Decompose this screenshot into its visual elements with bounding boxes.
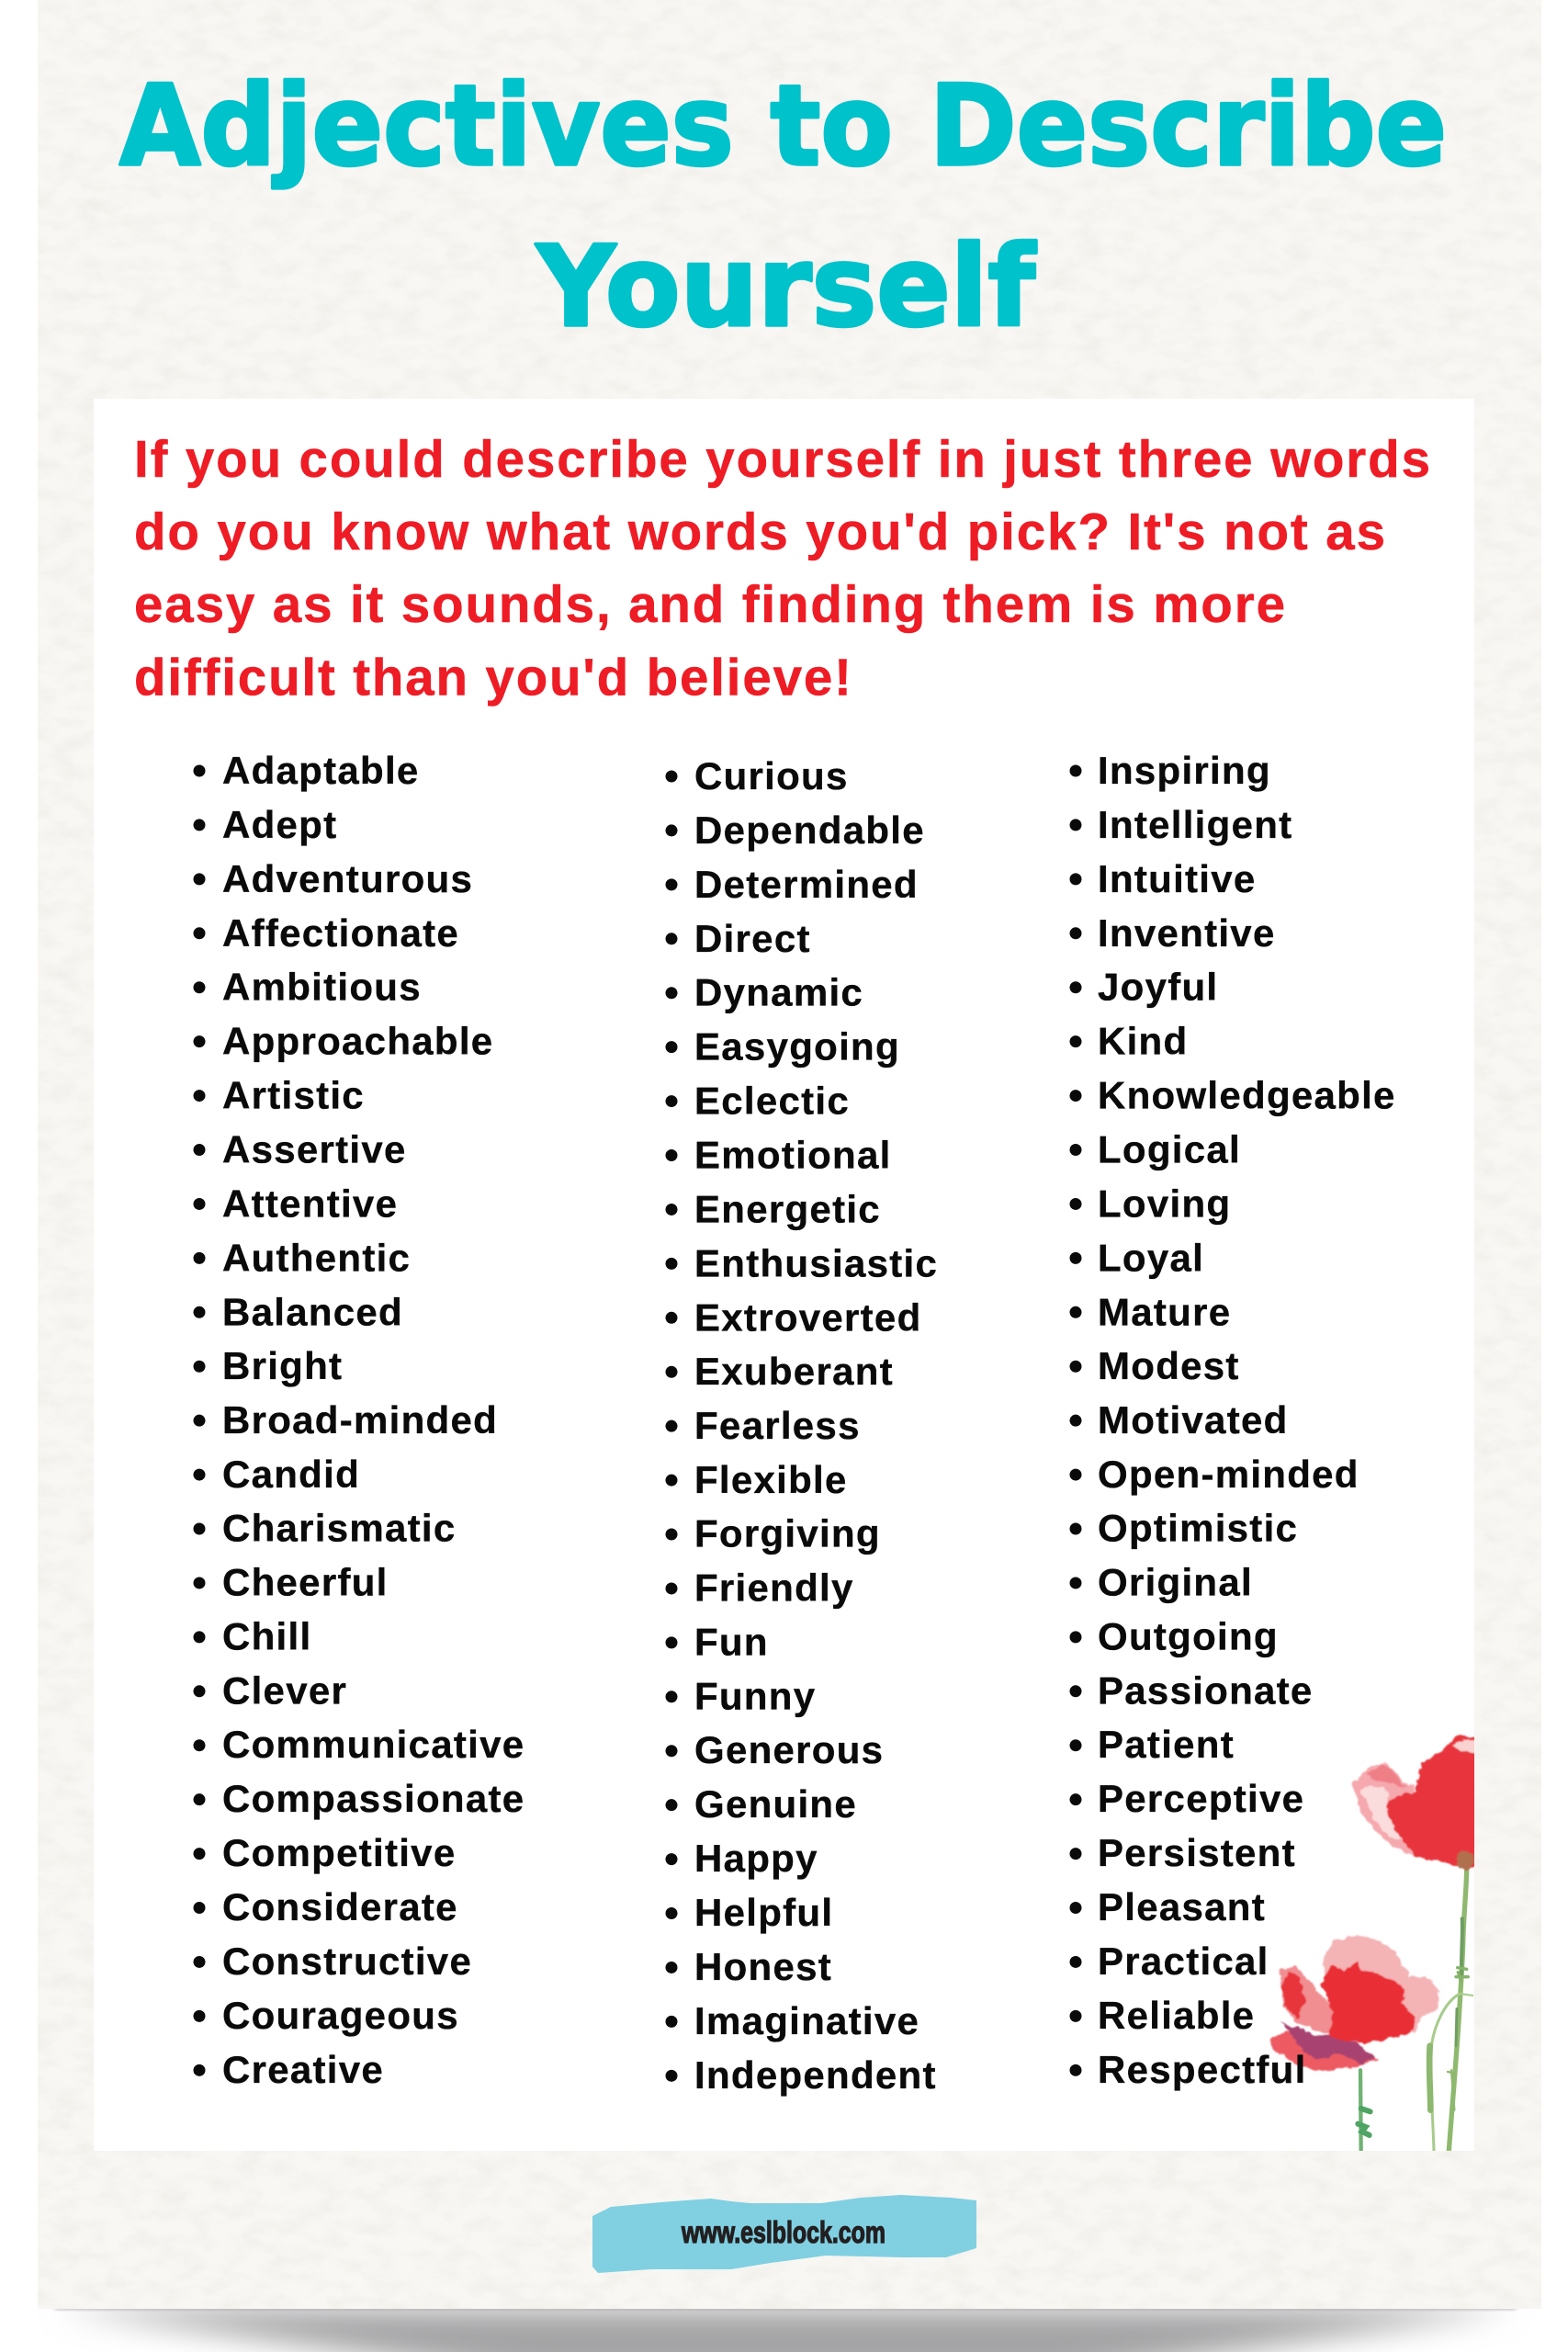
- word list: column 1: [199, 749, 536, 2091]
- word list: column 3: Joyful: [1098, 966, 1218, 1009]
- word list: column 2: Determined: [694, 863, 919, 906]
- word list: column 2: Extroverted: [694, 1295, 922, 1339]
- word list: column 1: Adept: [222, 803, 337, 846]
- word list: column 2: Eclectic: [694, 1080, 850, 1123]
- word list: column 1: Bright: [222, 1344, 343, 1387]
- word list: column 3: Logical: [1098, 1128, 1241, 1170]
- word list: column 3: Reliable: [1098, 1994, 1255, 2037]
- word list: column 1: Affectionate: [222, 911, 459, 955]
- word list: column 3: Passionate: [1098, 1668, 1314, 1712]
- word list: column 1: Adventurous: [222, 857, 473, 900]
- word list: column 3: Loyal: [1098, 1236, 1204, 1279]
- word list: column 1: Clever: [222, 1668, 347, 1712]
- word list: column 2: Flexible: [694, 1458, 848, 1501]
- icon: poppy stems: [1358, 1871, 1472, 2151]
- word list: column 1: Constructive: [222, 1939, 472, 1983]
- word list: column 3: Loving: [1098, 1182, 1231, 1225]
- word list: column 3: Mature: [1098, 1290, 1231, 1333]
- word list: column 1: Considerate: [222, 1885, 458, 1928]
- word list: column 3: Patient: [1098, 1723, 1235, 1766]
- word list: column 2: Curious: [694, 754, 849, 797]
- word list: column 3: Optimistic: [1098, 1507, 1298, 1549]
- word list: column 2: Forgiving: [694, 1512, 881, 1555]
- icon: watercolor poppies: [1270, 1736, 1477, 2151]
- word list: column 2: Helpful: [694, 1891, 833, 1934]
- word list: column 1: Artistic: [222, 1074, 365, 1117]
- word list: column 2: Happy: [694, 1837, 818, 1880]
- word list: column 2: Fun: [694, 1620, 769, 1663]
- title: Yourself: [535, 222, 1036, 352]
- word list: column 2: Enthusiastic: [694, 1241, 938, 1284]
- word list: column 3: Intuitive: [1098, 857, 1257, 900]
- word list: column 3: Persistent: [1098, 1831, 1296, 1874]
- word list: column 2: Funny: [694, 1674, 816, 1717]
- word list: column 3: Motivated: [1098, 1398, 1289, 1442]
- word list: column 2: Honest: [694, 1945, 832, 1988]
- top shadow: [41, 0, 1539, 3]
- title: Adjectives to Describe: [119, 62, 1447, 191]
- word list: column 1: Adaptable: [222, 749, 420, 792]
- intro text: difficult than you'd believe!: [134, 649, 852, 706]
- intro text: easy as it sounds, and finding them is more: [134, 575, 1285, 633]
- word list: column 2: Genuine: [694, 1782, 857, 1826]
- icon: top poppy: [1353, 1736, 1477, 1869]
- word list: column 3: Knowledgeable: [1098, 1074, 1396, 1117]
- word list: column 1: Ambitious: [222, 966, 422, 1009]
- word list: column 3: Respectful: [1098, 2048, 1307, 2091]
- word list: column 2: Direct: [694, 917, 811, 960]
- word list: column 2: Exuberant: [694, 1350, 894, 1393]
- word list: column 2: [671, 754, 950, 2097]
- word list: column 1: Creative: [222, 2048, 384, 2091]
- footer: website badge: [592, 2195, 976, 2273]
- word list: column 3: Open-minded: [1098, 1453, 1359, 1496]
- intro text: If you could describe yourself in just three words: [134, 430, 1430, 488]
- word list: column 2: Imaginative: [694, 1999, 919, 2042]
- word list: column 3: Intelligent: [1098, 803, 1292, 846]
- word list: column 3: Inventive: [1098, 911, 1276, 955]
- word list: column 1: Courageous: [222, 1994, 459, 2037]
- title: [119, 62, 1447, 352]
- word list: column 1: Chill: [222, 1614, 311, 1657]
- word list: column 1: Balanced: [222, 1290, 403, 1333]
- word list: column 3: Kind: [1098, 1020, 1188, 1063]
- word list: column 2: Fearless: [694, 1404, 861, 1447]
- bottom shadow: [55, 2306, 1516, 2352]
- word list: column 3: Perceptive: [1098, 1777, 1304, 1820]
- word list: column 1: Cheerful: [222, 1560, 389, 1604]
- word list: column 3: [1076, 749, 1408, 2091]
- panel: white sheet: [94, 399, 1474, 2151]
- word list: column 1: Approachable: [222, 1020, 493, 1063]
- word list: column 2: Easygoing: [694, 1025, 900, 1069]
- word list: column 2: Energetic: [694, 1187, 881, 1230]
- word list: column 2: Friendly: [694, 1566, 854, 1610]
- word list: column 2: Dependable: [694, 808, 925, 852]
- word list: column 1: Broad-minded: [222, 1398, 498, 1442]
- word list: column 3: Pleasant: [1098, 1885, 1266, 1928]
- word list: column 1: Charismatic: [222, 1507, 457, 1549]
- intro text: do you know what words you'd pick? It's not as: [134, 503, 1385, 560]
- word list: column 1: Assertive: [222, 1128, 407, 1170]
- footer: website badge: www.eslblock.com: [681, 2215, 886, 2249]
- word list: column 3: Original: [1098, 1560, 1253, 1604]
- word list: column 1: Candid: [222, 1453, 360, 1496]
- word list: column 3: Outgoing: [1098, 1614, 1279, 1657]
- intro text: [134, 430, 1430, 706]
- word list: column 3: Modest: [1098, 1344, 1240, 1387]
- word list: column 2: Dynamic: [694, 971, 863, 1014]
- word list: column 2: Emotional: [694, 1134, 892, 1176]
- word list: column 2: Generous: [694, 1728, 884, 1771]
- word list: column 2: Independent: [694, 2053, 937, 2097]
- word list: column 1: Compassionate: [222, 1777, 525, 1820]
- word list: column 3: Inspiring: [1098, 749, 1271, 792]
- word list: column 1: Competitive: [222, 1831, 456, 1874]
- word list: column 1: Attentive: [222, 1182, 398, 1225]
- icon: bottom poppy: [1270, 1936, 1439, 2071]
- word list: column 1: Authentic: [222, 1236, 411, 1279]
- word list: column 3: Practical: [1098, 1939, 1269, 1983]
- word list: column 1: Communicative: [222, 1723, 525, 1766]
